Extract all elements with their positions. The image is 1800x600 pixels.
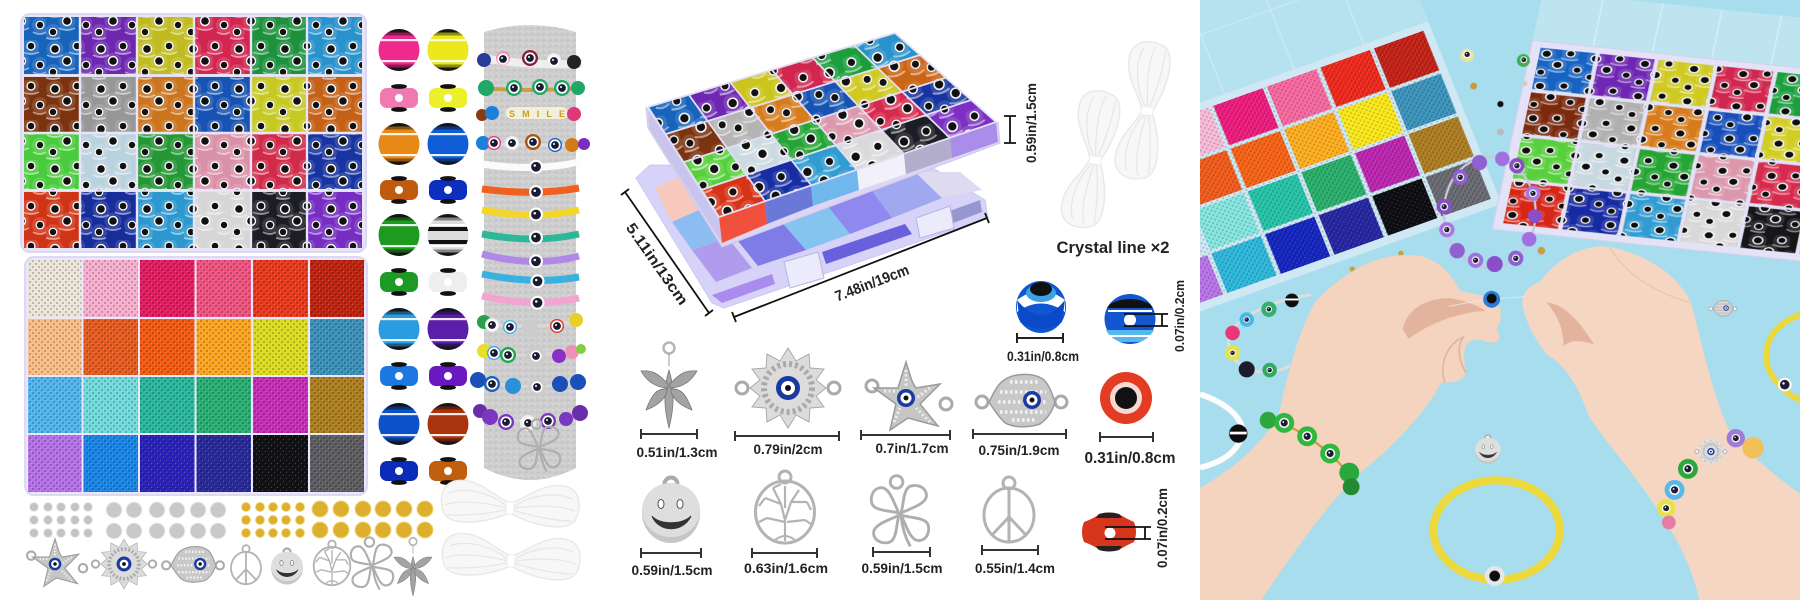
row of charms: [27, 537, 432, 596]
charm: hamsa eye: [973, 374, 1067, 458]
charm: leaf: 0.51in/1.3cm: [636, 444, 718, 460]
seed bead bracelets: [482, 162, 579, 303]
eye bead held between fingers: [1449, 291, 1525, 308]
dimension: box depth: [621, 189, 713, 316]
charm: hamsa eye: 0.75in/1.9cm: [978, 442, 1060, 458]
display cylinder with bracelets: [470, 25, 590, 480]
panel: kit contents: [21, 14, 590, 596]
beaded bracelets lower with charms: [470, 313, 588, 472]
purple eye bracelet on tray: [1437, 152, 1542, 272]
lower seed bead box: [636, 165, 988, 308]
bracelet on right wrist: [1657, 429, 1764, 529]
dimension: box length: 7.48in/19cm: [833, 262, 912, 305]
beaded bracelets upper: [476, 50, 590, 152]
smiley charm on table: [1475, 435, 1501, 464]
charm: sun eye: [735, 348, 840, 457]
striped blue bead with hole size: [1104, 280, 1187, 352]
dimension: box height: [1004, 83, 1039, 163]
red bead side view with hole size: [1082, 488, 1170, 568]
charm: tree of life: 0.63in/1.6cm: [744, 560, 828, 576]
left hand and arm: [1200, 255, 1501, 600]
beaded bracelets upper: SMILE: [509, 109, 565, 119]
red eye bead front view: [1084, 372, 1176, 467]
hamsa charm on table: [1709, 300, 1737, 316]
striped blue bead with hole size: 0.07in/0.2cm: [1172, 280, 1187, 352]
panel: dimensions: [621, 33, 1187, 578]
tray: evil eye beads: [21, 14, 366, 252]
stray loose beads: [1350, 49, 1545, 272]
label: crystal line: Crystal line ×2: [1056, 238, 1170, 257]
multicolour bracelet at left: [1225, 294, 1311, 377]
panel: lifestyle photo: [1200, 0, 1800, 600]
right hand and arm: [1522, 246, 1800, 600]
yellow seed bead bracelet: [1433, 480, 1560, 586]
dimension: bead diameter: 0.31in/0.8cm: [1007, 348, 1079, 364]
eye bead tray in photo: [1492, 0, 1800, 268]
charm: leaf: [636, 342, 718, 460]
bracelet eye beads: [529, 160, 544, 310]
charm: sun eye: 0.79in/2cm: [754, 441, 822, 457]
crystal line spools: [440, 479, 581, 581]
charm: clover: 0.59in/1.5cm: [862, 560, 942, 576]
dimension: box height: 0.59in/1.5cm: [1023, 83, 1039, 163]
small metal spacer beads: [30, 501, 433, 539]
charm: tree of life: [744, 471, 828, 576]
charm: starfish eye: 0.7in/1.7cm: [876, 440, 948, 456]
charm: smiley: 0.59in/1.5cm: [632, 562, 712, 578]
charm: smiley: [632, 478, 712, 578]
tray: seed beads: [25, 257, 367, 495]
red eye bead front view: 0.31in/0.8cm: [1084, 450, 1176, 467]
loose striped beads: [377, 28, 470, 485]
white bracelet at left: [1200, 394, 1247, 468]
crystal line spools upright: [1058, 39, 1173, 231]
charm: clover: [862, 476, 942, 576]
dimension: box length: [732, 213, 989, 322]
upper evil eye box: [646, 33, 1000, 247]
green bracelet on left wrist: [1260, 412, 1360, 495]
dimension: box depth: 5.11in/13cm: [622, 220, 691, 308]
charm: starfish eye: [861, 362, 952, 456]
yellow bracelet at right: [1766, 315, 1800, 400]
red bead side view with hole size: 0.07in/0.2cm: [1154, 488, 1170, 568]
round blue eye bead: [1007, 281, 1079, 364]
charm: peace: [975, 477, 1055, 576]
charm: peace: 0.55in/1.4cm: [975, 560, 1055, 576]
seed bead tray in photo: [1200, 0, 1498, 312]
